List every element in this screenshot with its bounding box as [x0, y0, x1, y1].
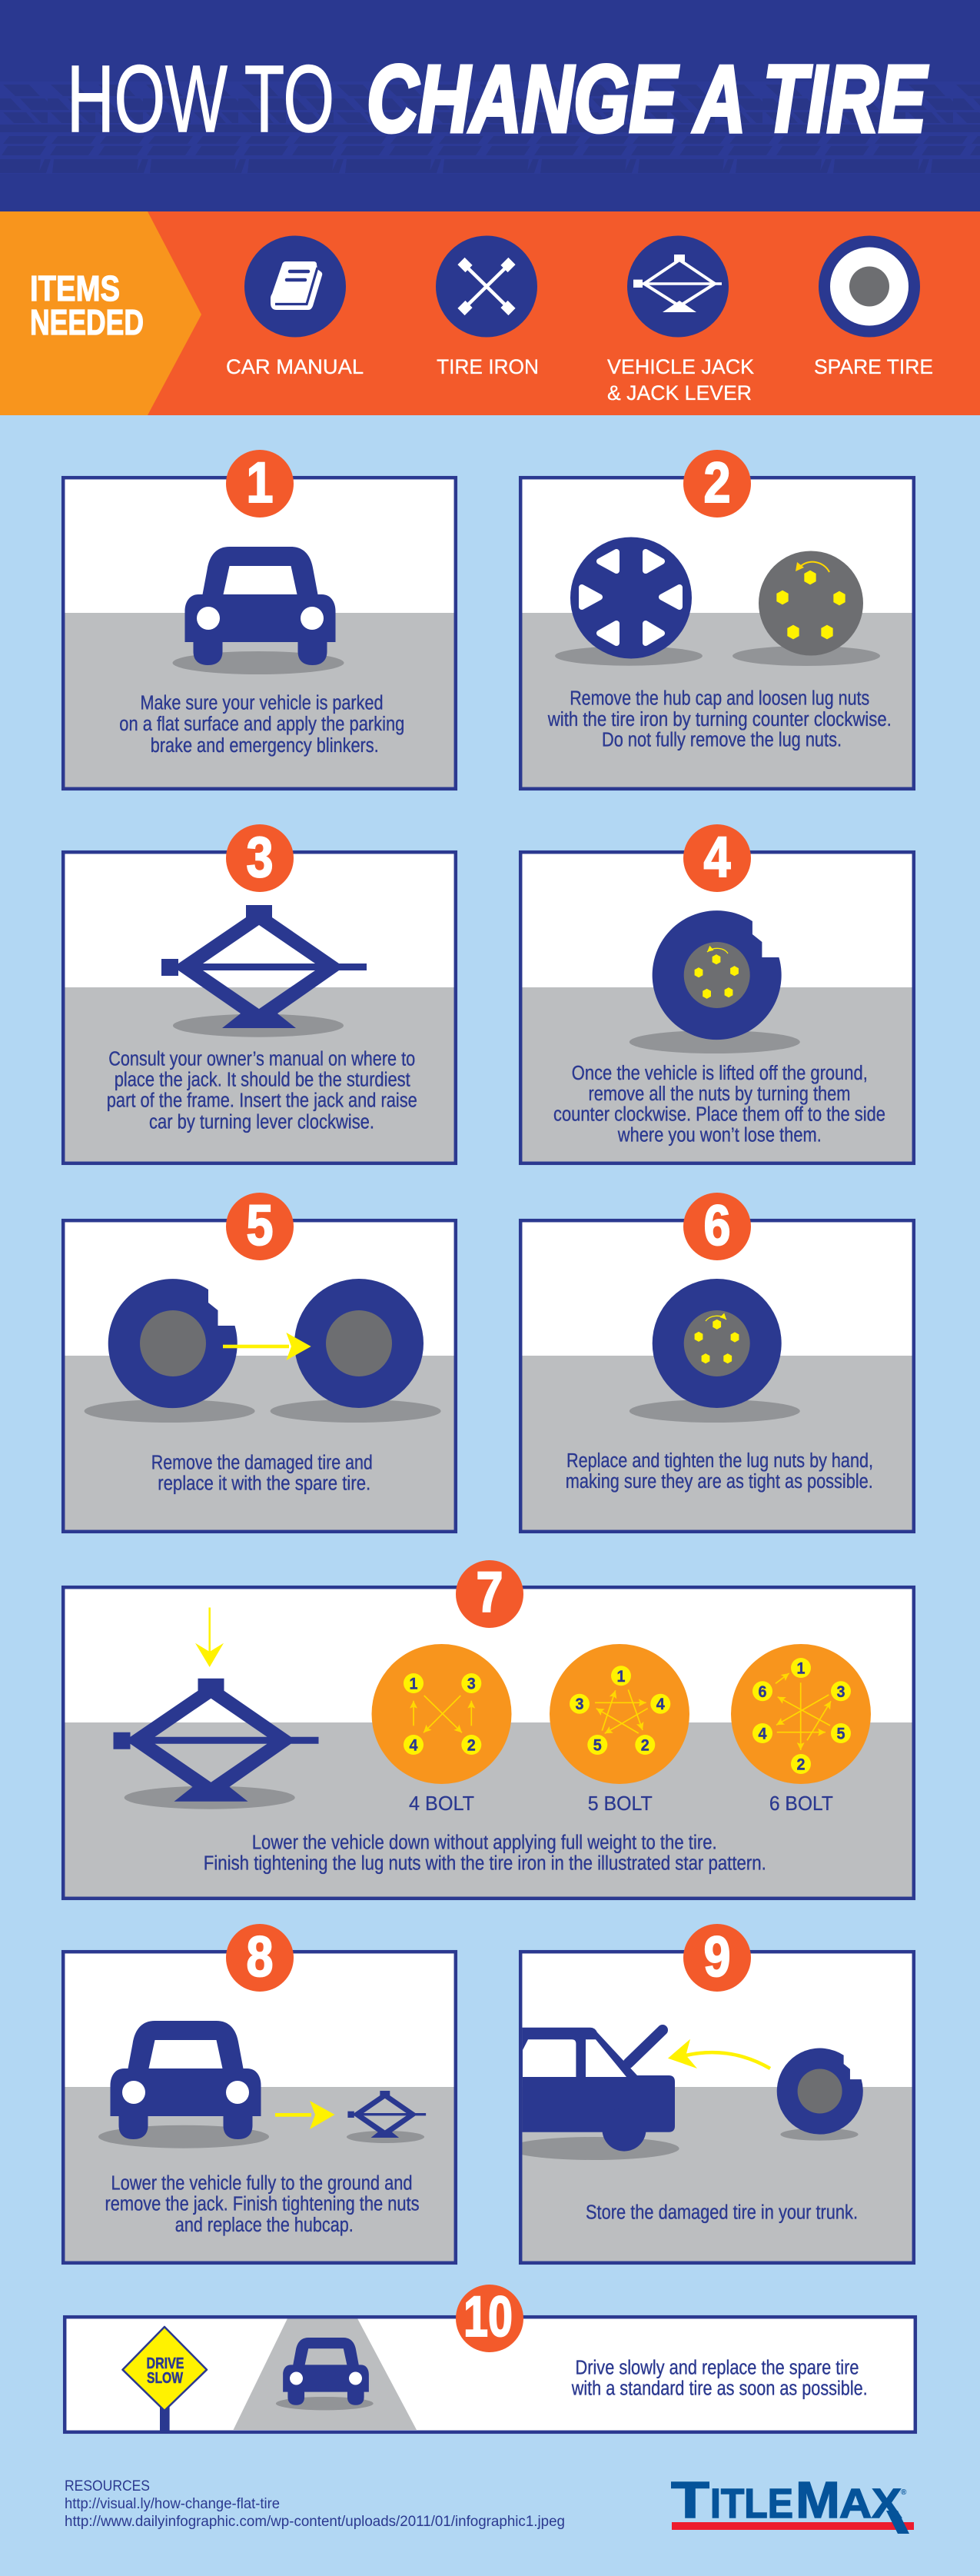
- step 5 text: Remove the damaged tire and: [151, 1453, 373, 1474]
- arrow: swap tire: [223, 1333, 311, 1360]
- TitleMax logo: ®: [901, 2488, 907, 2497]
- panel: step 5: [63, 1193, 456, 1532]
- step 8 text: [105, 2172, 420, 2236]
- step 3 text: part of the frame. Insert the jack and raise: [107, 1090, 417, 1112]
- step 8 text: Lower the vehicle fully to the ground and: [111, 2172, 412, 2194]
- illustration: scissor jack: [161, 905, 367, 1037]
- badge 5: [226, 1193, 294, 1260]
- step 10 text: with a standard tire as soon as possible.: [571, 2378, 868, 2399]
- badge 7: [456, 1560, 523, 1628]
- arrow: remove jack: [275, 2101, 335, 2129]
- badge 8: 8: [246, 1925, 274, 1989]
- icon: car manual: [244, 235, 346, 337]
- items needed arrow tab: [0, 211, 201, 415]
- TitleMax logo: AX: [839, 2481, 902, 2527]
- panel: step 7: [63, 1560, 914, 1899]
- panel: step 10: [65, 2285, 915, 2432]
- step 3 text: place the jack. It should be the sturdiest: [115, 1070, 410, 1091]
- badge 3: 3: [246, 825, 274, 889]
- step 2 text: with the tire iron by turning counter clockwise.: [547, 709, 892, 731]
- resources text: [65, 2478, 565, 2530]
- step 1 text: [119, 693, 404, 757]
- illustration: hub cap: [555, 537, 703, 666]
- diagram: 6 bolt pattern: 4: [758, 1724, 767, 1742]
- step 6 text: [566, 1450, 873, 1493]
- resources text: http://visual.ly/how-change-flat-tire: [65, 2496, 280, 2512]
- diagram: 6 bolt pattern: 6: [758, 1682, 767, 1701]
- diagram: 6 bolt pattern: 6 BOLT: [769, 1792, 833, 1815]
- step 4 text: Once the vehicle is lifted off the ground,: [572, 1063, 868, 1084]
- diagram: 4 bolt pattern: 4 BOLT: [409, 1792, 474, 1815]
- panel: step 2: [520, 450, 914, 789]
- step 8 text: and replace the hubcap.: [175, 2215, 354, 2236]
- panel: step 8: [63, 1924, 456, 2263]
- diagram: 5 bolt pattern: 1: [616, 1667, 626, 1686]
- diagram: 5 bolt pattern: 4: [656, 1695, 665, 1713]
- diagram: 4 bolt pattern: 2: [467, 1736, 476, 1755]
- badge 7: 7: [477, 1560, 503, 1624]
- badge 9: [683, 1924, 751, 1992]
- step 2 text: [547, 688, 892, 751]
- badge 1: [226, 450, 294, 518]
- TitleMax logo: M: [796, 2471, 840, 2529]
- resources text: RESOURCES: [65, 2478, 150, 2494]
- diagram: 6 bolt pattern: 1: [796, 1659, 806, 1678]
- illustration: lowering jack: [114, 1607, 318, 1809]
- items needed band: [0, 211, 980, 415]
- illustration: small car on road: [276, 2338, 374, 2410]
- panel border: [65, 2317, 915, 2432]
- step 2 text: Do not fully remove the lug nuts.: [602, 730, 842, 751]
- step 3 text: [107, 1049, 417, 1133]
- step 2 text: Remove the hub cap and loosen lug nuts: [570, 688, 869, 710]
- step 6 text: Replace and tighten the lug nuts by hand,: [566, 1450, 873, 1472]
- illustration: road: [234, 2318, 417, 2430]
- diagram: 5 bolt pattern: 5: [593, 1736, 602, 1755]
- step 6 text: making sure they are as tight as possible.: [566, 1471, 873, 1493]
- illustration: damaged tire: [85, 1279, 255, 1423]
- illustration: spare tire: [271, 1279, 441, 1423]
- icon: tire iron: [436, 235, 537, 337]
- item labels: & JACK LEVER: [607, 381, 752, 404]
- diagram: 4 bolt pattern: 3: [467, 1675, 476, 1693]
- panel: step 1: [63, 450, 456, 789]
- step 10 text: [571, 2357, 868, 2399]
- step 7 text: Finish tightening the lug nuts with the tire iron in the illustrated star pattern.: [204, 1853, 766, 1875]
- diagram: 4 bolt pattern: 1: [409, 1675, 418, 1693]
- TitleMax logo: [671, 2471, 914, 2534]
- title: [67, 47, 929, 152]
- step 4 text: counter clockwise. Place them off to the side: [553, 1104, 885, 1126]
- step 3 text: Consult your owner’s manual on where to: [108, 1049, 415, 1070]
- icon: drive slow sign: SLOW: [147, 2369, 183, 2387]
- badge 9: 9: [704, 1925, 730, 1989]
- illustration: parked car: [172, 547, 344, 674]
- title: HOW TO: [67, 47, 334, 152]
- panel: step 9: [509, 1924, 914, 2263]
- step 9 text: Store the damaged tire in your trunk.: [586, 2202, 858, 2223]
- badge 4: 4: [704, 825, 730, 889]
- step 4 text: where you won’t lose them.: [617, 1125, 822, 1147]
- icon: drive slow sign: [123, 2327, 207, 2431]
- items needed arrow tab: ITEMS: [30, 268, 120, 308]
- badge 4: [683, 824, 751, 892]
- items needed arrow tab: NEEDED: [30, 302, 144, 342]
- item labels: [226, 355, 933, 404]
- TitleMax logo: ITLE: [710, 2481, 793, 2527]
- badge 8: [226, 1924, 294, 1992]
- illustration: lifted damaged tire: [630, 910, 800, 1053]
- icon: drive slow sign: DRIVE: [146, 2355, 184, 2372]
- diagram: 6 bolt pattern: 2: [796, 1755, 806, 1773]
- badge 5: 5: [246, 1193, 274, 1257]
- illustration: lowered car: [98, 2021, 269, 2148]
- step 4 text: [553, 1063, 885, 1147]
- diagram: 4 bolt pattern: [372, 1644, 512, 1815]
- item labels: CAR MANUAL: [226, 355, 364, 378]
- diagram: 5 bolt pattern: [550, 1644, 689, 1815]
- step 10 text: Drive slowly and replace the spare tire: [575, 2357, 859, 2378]
- badge 2: [683, 450, 751, 518]
- diagram: 6 bolt pattern: [731, 1644, 871, 1815]
- badge 10: 10: [463, 2285, 513, 2348]
- step 8 text: remove the jack. Finish tightening the nuts: [105, 2193, 420, 2215]
- badge 2: 2: [704, 451, 730, 514]
- illustration: damaged tire small: [777, 2048, 863, 2141]
- item labels: VEHICLE JACK: [607, 355, 754, 378]
- illustration: small jack: [347, 2091, 426, 2143]
- step 5 text: replace it with the spare tire.: [158, 1473, 370, 1495]
- step 1 text: brake and emergency blinkers.: [151, 735, 379, 757]
- illustration: truck with open trunk: [509, 2028, 679, 2160]
- badge 1: 1: [246, 451, 274, 514]
- step 1 text: Make sure your vehicle is parked: [140, 693, 383, 714]
- step 5 text: [151, 1453, 373, 1495]
- step 7 text: Lower the vehicle down without applying full weight to the tire.: [252, 1832, 717, 1854]
- step 4 text: remove all the nuts by turning them: [589, 1083, 850, 1105]
- illustration: spare tire with lug nuts: [630, 1279, 800, 1423]
- diagram: 5 bolt pattern: 3: [575, 1695, 584, 1713]
- arrow: to trunk: [668, 2039, 770, 2068]
- illustration: wheel with lug nuts: [733, 551, 880, 666]
- resources text: http://www.dailyinfographic.com/wp-content/uploads/2011/01/infographic1.jpeg: [65, 2514, 565, 2530]
- header banner: [0, 0, 980, 211]
- icon: spare tire: [819, 235, 920, 337]
- panel: step 4: [520, 824, 914, 1163]
- step 1 text: on a flat surface and apply the parking: [119, 714, 404, 735]
- step 7 text: [204, 1832, 766, 1875]
- TitleMax logo: T: [671, 2471, 709, 2529]
- step 3 text: car by turning lever clockwise.: [149, 1111, 374, 1133]
- diagram: 5 bolt pattern: 2: [641, 1736, 649, 1755]
- diagram: 6 bolt pattern: 5: [836, 1724, 845, 1742]
- badge 6: 6: [704, 1193, 730, 1257]
- icon: vehicle jack: [627, 235, 729, 337]
- item labels: TIRE IRON: [437, 355, 539, 378]
- panel: step 3: [63, 824, 456, 1163]
- diagram: 5 bolt pattern: 5 BOLT: [588, 1792, 653, 1815]
- tire tread pattern: [0, 82, 980, 174]
- diagram: 6 bolt pattern: 3: [836, 1682, 845, 1701]
- diagram: 4 bolt pattern: 4: [409, 1736, 418, 1755]
- badge 6: [683, 1193, 751, 1260]
- item labels: SPARE TIRE: [814, 355, 933, 378]
- panel: step 6: [520, 1193, 914, 1532]
- badge 3: [226, 824, 294, 892]
